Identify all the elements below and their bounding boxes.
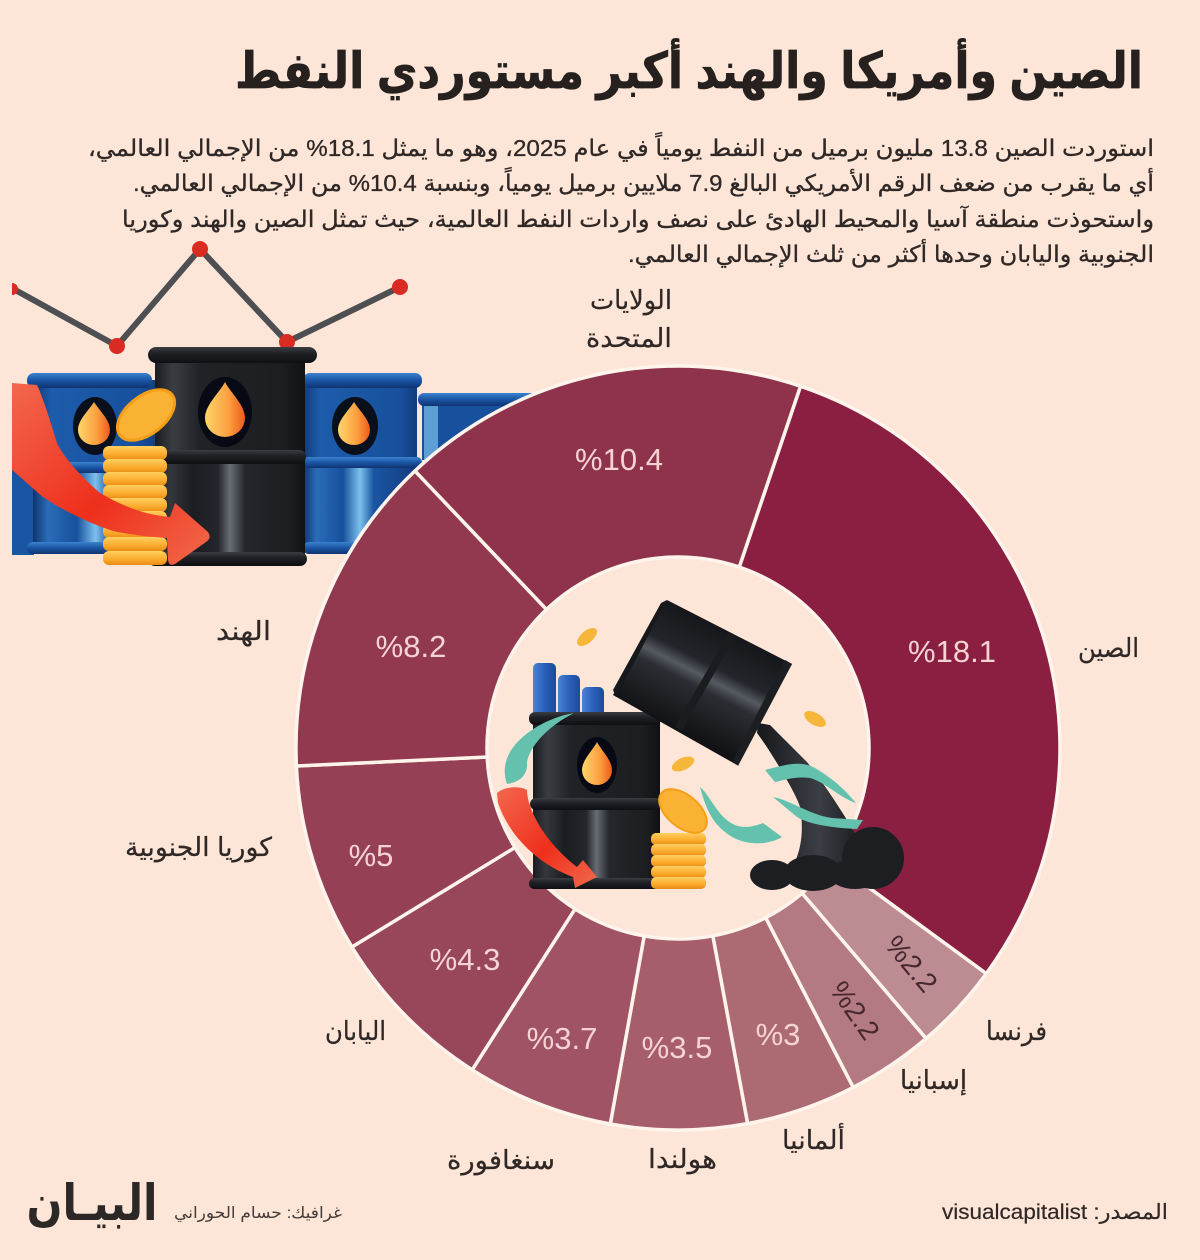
country labels	[125, 285, 1139, 1176]
country labels: الصين	[1078, 633, 1139, 664]
source: المصدر: visualcapitalist	[942, 1201, 1168, 1224]
value labels: %2.2	[879, 929, 944, 998]
tilted coin	[116, 388, 176, 442]
value labels: %8.2	[376, 629, 446, 664]
intro paragraph: الجنوبية واليابان وحدها أكثر من ثلث الإجمالي العالمي.	[628, 239, 1154, 268]
segment: India	[296, 471, 678, 766]
teal ribbons right	[700, 764, 863, 843]
intro paragraph	[88, 132, 1154, 268]
intro paragraph: أي ما يقرب من ضعف الرقم الأمريكي البالغ 7.9 ملايين برميل يومياً، وبنسبة 10.4% من الإجمالي العالمي.	[133, 167, 1154, 197]
segment: United States	[415, 366, 800, 748]
illustration: pouring barrel in donut centre	[497, 600, 904, 891]
small flying coins	[574, 625, 828, 775]
graphic credit: غرافيك: حسام الحوراني	[174, 1205, 342, 1223]
teal ribbon left	[505, 713, 574, 784]
segment: France	[678, 748, 986, 1038]
value labels: %4.3	[430, 942, 500, 977]
value labels: %5	[349, 838, 393, 873]
segment: Spain	[678, 748, 926, 1087]
country labels: كوريا الجنوبية	[125, 832, 273, 863]
falling red arrow	[12, 383, 210, 565]
tilted coin	[651, 781, 715, 841]
country labels: الهند	[216, 616, 271, 647]
country labels: إسبانيا	[900, 1065, 967, 1096]
bar chart icon	[533, 663, 604, 723]
country labels: سنغافورة	[447, 1145, 555, 1176]
value labels: %10.4	[575, 442, 663, 477]
value labels: %2.2	[824, 976, 886, 1046]
black barrel	[148, 347, 317, 566]
logo: Al Bayan: البيـان	[26, 1175, 158, 1231]
country labels: اليابان	[325, 1016, 386, 1046]
value labels: %3.7	[527, 1021, 597, 1056]
coin stack	[103, 446, 167, 565]
upright black barrel	[529, 712, 661, 889]
value labels: %3	[756, 1017, 800, 1052]
value labels: %18.1	[908, 634, 996, 669]
red arrow	[497, 787, 597, 888]
segment: South Korea	[296, 748, 678, 947]
donut chart	[296, 366, 1060, 1130]
line chart	[6, 241, 408, 354]
coin stack	[651, 833, 706, 889]
donut hole	[487, 557, 869, 939]
segment: Netherlands	[610, 748, 748, 1130]
intro paragraph: واستحوذت منطقة آسيا والمحيط الهادئ على نصف واردات النفط العالمية، حيث تمثل الصين والهند وكوريا	[122, 205, 1154, 233]
left blue barrel	[12, 373, 158, 554]
country labels: فرنسا	[986, 1016, 1047, 1047]
country labels: الولايات	[590, 285, 672, 316]
value labels	[349, 442, 996, 1065]
intro paragraph: استوردت الصين 13.8 مليون برميل من النفط يومياً في عام 2025، وهو ما يمثل 18.1% من الإجمالي العالمي،	[88, 132, 1154, 162]
country labels: ألمانيا	[782, 1122, 845, 1155]
tilted pouring barrel	[613, 600, 792, 766]
far-left blue barrel	[12, 470, 34, 555]
segment: Japan	[352, 748, 678, 1070]
oil stream and puddle	[750, 723, 904, 891]
value labels: %3.5	[642, 1030, 712, 1065]
far-right blue barrel	[418, 393, 532, 460]
country labels: هولندا	[648, 1144, 717, 1175]
right blue barrel	[303, 373, 422, 554]
segment: China	[678, 386, 1060, 974]
country labels: المتحدة	[586, 323, 672, 353]
segment: Singapore	[472, 748, 678, 1124]
illustration: oil barrels with line chart, coins and falling arrow	[6, 241, 548, 566]
segment: Germany	[678, 748, 853, 1124]
